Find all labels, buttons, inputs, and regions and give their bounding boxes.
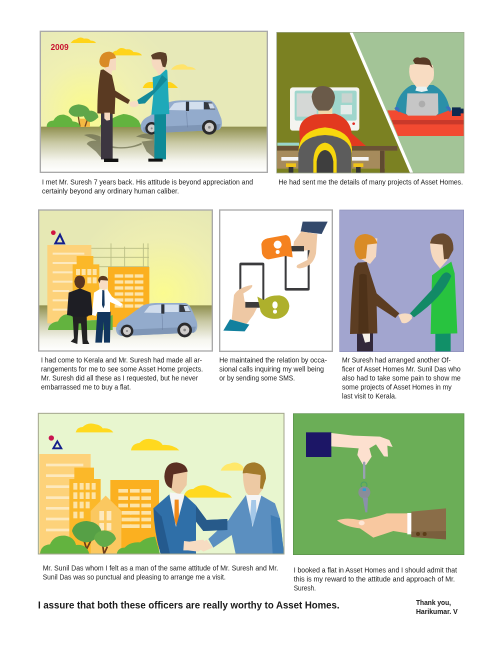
text block: caption 1 (42, 178, 253, 195)
text block: caption 2: He had sent me the details of many projects of Asset Homes. (278, 178, 463, 186)
icon: car (141, 100, 222, 135)
icon: trees and bushes (40, 521, 160, 554)
text block: signature: Thank you, (416, 598, 451, 607)
icon: olive speech bubble (257, 295, 289, 319)
text block: caption 6 (43, 564, 278, 582)
text block: caption 5: Mr Suresh had arranged another Of- (342, 356, 451, 365)
icon: left man in brown jacket (97, 52, 139, 162)
icon: right man in teal jacket (137, 52, 169, 162)
icon: key (358, 462, 370, 512)
text block: caption 6: Sunil Das was so punctual and pleasing to arrange me a visit. (43, 573, 226, 582)
icon: mug (452, 107, 464, 116)
text block: caption 7: Suresh. (294, 584, 316, 593)
icon: buildings (47, 245, 149, 327)
icon: buildings (39, 454, 159, 554)
text block: caption 4 (219, 356, 327, 383)
text block: caption 5: last visit to Kerala. (342, 392, 397, 401)
label: year 2009: 2009 (51, 43, 69, 52)
icon: construction scaffold (91, 243, 149, 268)
icon: logo (51, 230, 64, 243)
icon: left man in brown jacket (350, 234, 412, 352)
icon: orange speech bubble (261, 235, 293, 259)
icon: shadows (84, 134, 155, 158)
text block: caption 3: I had come to Kerala and Mr. Suresh had made all ar- (41, 356, 202, 365)
text block: caption 3: rangements for me to see some Asset Home projects. (41, 365, 203, 374)
text block: caption 4: sional calls inquiring my well being (219, 365, 324, 374)
icon: bushes (48, 314, 113, 330)
text block: caption 5: some projects of Asset Homes in my (342, 383, 452, 392)
text block: caption 5: ficer of Asset Homes Mr. Sunil Das who (342, 365, 461, 374)
icon: right man in green jacket (410, 233, 457, 352)
text block: caption 3: embarrassed me to buy a flat. (41, 383, 131, 392)
text block: caption 1: certainly beyond any ordinary human caliber. (42, 186, 179, 195)
panel: handing over the key (293, 414, 464, 555)
icon: right man in light blue suit (197, 462, 284, 554)
text block: caption 6: Mr. Sunil Das whom I felt as a man of the same attitude of Mr. Suresh and Mr. (43, 564, 278, 573)
icon: clouds (76, 423, 243, 498)
text block: caption 3 (41, 356, 203, 392)
icon: man from behind at computer (298, 86, 366, 173)
icon: logo (49, 435, 61, 448)
icon: left man in dark blue suit (153, 462, 227, 554)
icon: bottom hand with sleeve (337, 508, 446, 539)
heading: closing statement: I assure that both these officers are really worthy to Asset Homes. (38, 599, 340, 611)
icon: computer monitor (290, 87, 359, 131)
text block: caption 4: He maintained the relation by occa- (219, 356, 327, 365)
icon: trees and bushes (47, 104, 142, 127)
text block: caption 7 (294, 566, 458, 593)
text block: caption 7: I booked a flat in Asset Homes and I should admit that (294, 566, 458, 575)
icon: top hand with sleeve (306, 432, 393, 465)
icon: desk (277, 143, 397, 173)
icon: clouds (71, 37, 196, 88)
panel: 2009 first meeting handshake (40, 31, 267, 172)
text block: signature: Harikumar. V (416, 607, 458, 616)
icon: man in white shirt (92, 276, 123, 343)
icon: car (116, 303, 197, 337)
icon: top hand with phone (285, 222, 328, 291)
panel: two officers in city (38, 413, 284, 554)
icon: bottom hand with phone (223, 263, 264, 331)
text block: caption 7: this is my reward to the attitude and approach of Mr. (294, 575, 455, 584)
panel: site visit in Kerala (39, 210, 212, 351)
text block: caption 3: Mr. Suresh did all these as I requested, but he never (41, 374, 198, 383)
text block: caption 1: I met Mr. Suresh 7 years back. His attitude is beyond appreciation and (42, 178, 253, 186)
text block: signature (416, 598, 458, 616)
panel: office split scene (277, 32, 464, 173)
panel: phones and messages (220, 210, 332, 351)
panel: handshake with Sunil Das (340, 210, 464, 352)
text block: caption 5: also had to take some pain to show me (342, 374, 461, 383)
icon: man with laptop at red desk (387, 57, 464, 136)
text block: caption 5 (342, 356, 461, 401)
text block: caption 4: or by sending some SMS. (219, 374, 295, 383)
icon: man in black suit (67, 276, 93, 344)
